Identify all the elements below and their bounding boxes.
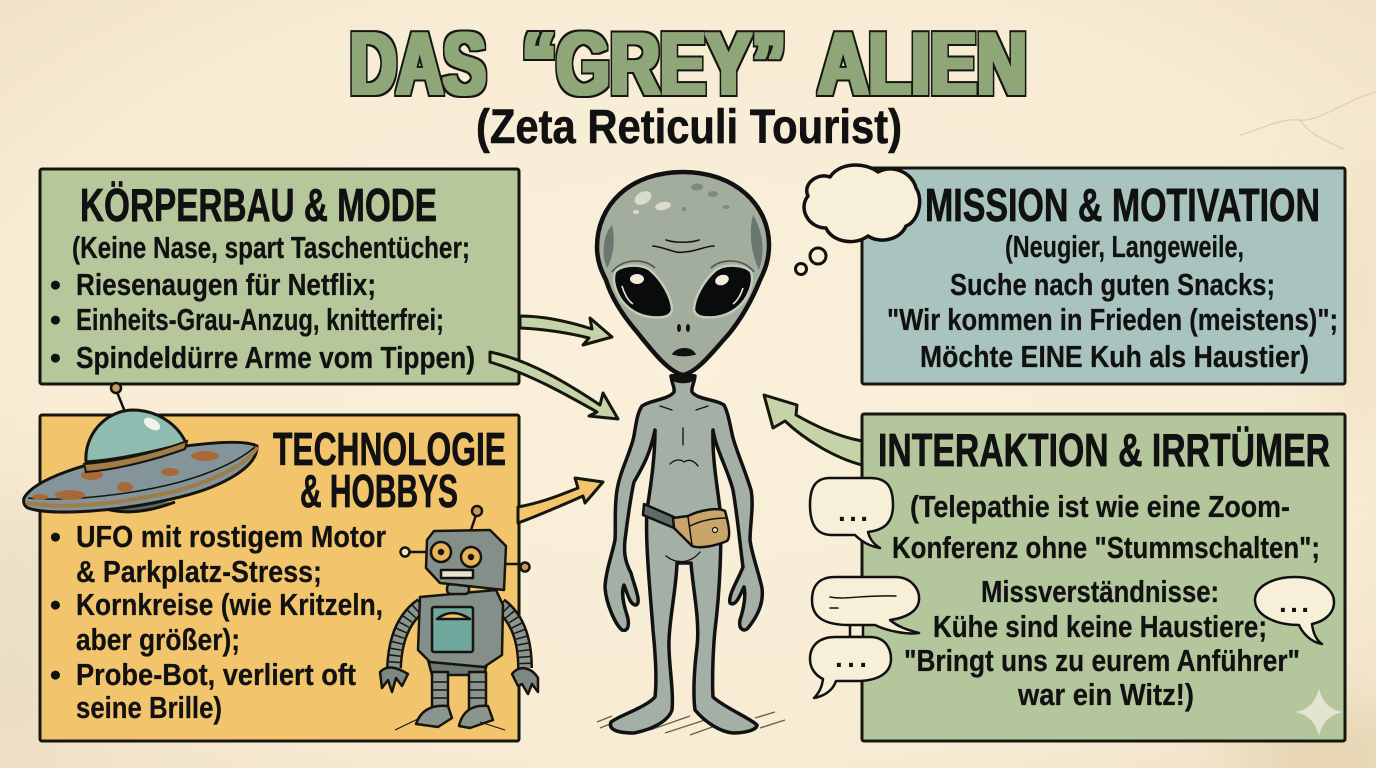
ground shadow: [597, 712, 785, 735]
text block: motivation: Möchte EINE Kuh als Haustier): [920, 339, 1309, 374]
text block: body list: (Keine Nase, spart Taschentücher;: [72, 230, 470, 265]
text block: body list: [50, 230, 475, 375]
fanny pack: [643, 504, 729, 547]
text block: hobby list: •: [50, 519, 61, 554]
text block: misunderstandings: Kühe sind keine Haustiere;: [933, 609, 1267, 644]
text block: hobby list: & Parkplatz-Stress;: [76, 554, 322, 589]
heading: Technologie & Hobbys: & HOBBYS: [300, 465, 458, 517]
forehead wrinkles: [653, 240, 714, 252]
icon: robot: [380, 506, 538, 730]
arrow: body to alien lower: [490, 352, 618, 419]
ufo saucer: [24, 442, 257, 512]
panel: Mission & Motivation: [862, 168, 1345, 384]
text block: hobby list: aber größer);: [76, 622, 240, 657]
text block: misunderstandings: [892, 489, 1320, 712]
right eye: [694, 261, 754, 317]
text block: misunderstandings: war ein Witz!): [1017, 677, 1194, 712]
illustration: grey alien: [597, 172, 785, 735]
heading: Technologie & Hobbys: [273, 423, 506, 517]
icon: speech bubble 3: ...: [835, 642, 867, 673]
icon: sparkle watermark: [1295, 688, 1343, 736]
arrow: interaction to alien: [764, 395, 862, 465]
head spots: [604, 184, 763, 270]
text block: body list: •: [50, 302, 61, 337]
left eye: [612, 261, 672, 317]
icon: speech bubble 4: ...: [1279, 587, 1309, 618]
text block: misunderstandings: Missverständnisse:: [981, 574, 1219, 609]
robot body: [418, 590, 503, 667]
panel: Technologie & Hobbys: [40, 415, 519, 741]
text block: hobby list: Probe-Bot, verliert oft: [76, 657, 356, 692]
robot legs and feet: [395, 660, 505, 730]
icon: speech bubble 1: [810, 478, 893, 548]
nose: [677, 324, 690, 332]
icon: speech bubble 4: [1255, 577, 1334, 644]
panel: Interaktion & Irrtümer: [862, 414, 1345, 741]
text block: motivation: Suche nach guten Snacks;: [950, 267, 1275, 302]
text block: body list: •: [50, 340, 61, 375]
text block: body list: •: [50, 267, 61, 302]
text block: body list: Einheits-Grau-Anzug, knitterfrei;: [76, 302, 444, 337]
panel: Körperbau & Mode: [40, 169, 519, 384]
icon: thought bubble: [796, 165, 920, 274]
title: “GREY”: [522, 14, 786, 113]
robot arms: [380, 605, 538, 694]
text block: motivation: (Neugier, Langeweile,: [1005, 229, 1244, 264]
text block: hobby list: Kornkreise (wie Kritzeln,: [76, 587, 383, 622]
ufo dome: [84, 410, 187, 472]
alien head: [597, 172, 769, 375]
text block: hobby list: •: [50, 657, 61, 692]
text block: body list: Riesenaugen für Netflix;: [76, 267, 376, 302]
heading: Technologie & Hobbys: TECHNOLOGIE: [273, 423, 506, 475]
text block: misunderstandings: "Bringt uns zu eurem Anführer": [904, 643, 1300, 678]
text block: misunderstandings: (Telepathie ist wie eine Zoom-: [910, 489, 1290, 524]
neck shadow: [671, 374, 695, 383]
ufo antenna: [111, 383, 125, 412]
mouth: [673, 349, 695, 356]
subtitle: (Zeta Reticuli Tourist): [476, 101, 902, 154]
text block: motivation: [887, 229, 1338, 374]
heading: Körperbau & Mode: KÖRPERBAU & MODE: [80, 179, 437, 231]
text block: hobby list: UFO mit rostigem Motor: [76, 519, 386, 554]
text block: hobby list: seine Brille): [76, 690, 222, 725]
icon: speech bubble 3: [810, 637, 891, 698]
text block: hobby list: •: [50, 587, 61, 622]
robot head: [400, 506, 530, 594]
title: DAS: [350, 14, 486, 113]
alien body: [605, 376, 762, 733]
icon: speech bubble 2: [812, 577, 919, 637]
title: [350, 14, 1027, 113]
arrow: technology to alien: [518, 478, 603, 523]
icon: speech bubble 1: ...: [838, 496, 868, 527]
arrow: body to alien upper: [520, 316, 612, 345]
text block: hobby list: [50, 519, 386, 725]
icon: ufo: [24, 383, 257, 512]
title: ALIEN: [818, 14, 1027, 113]
torso details: [660, 406, 708, 562]
text block: body list: Spindeldürre Arme vom Tippen): [76, 340, 475, 375]
